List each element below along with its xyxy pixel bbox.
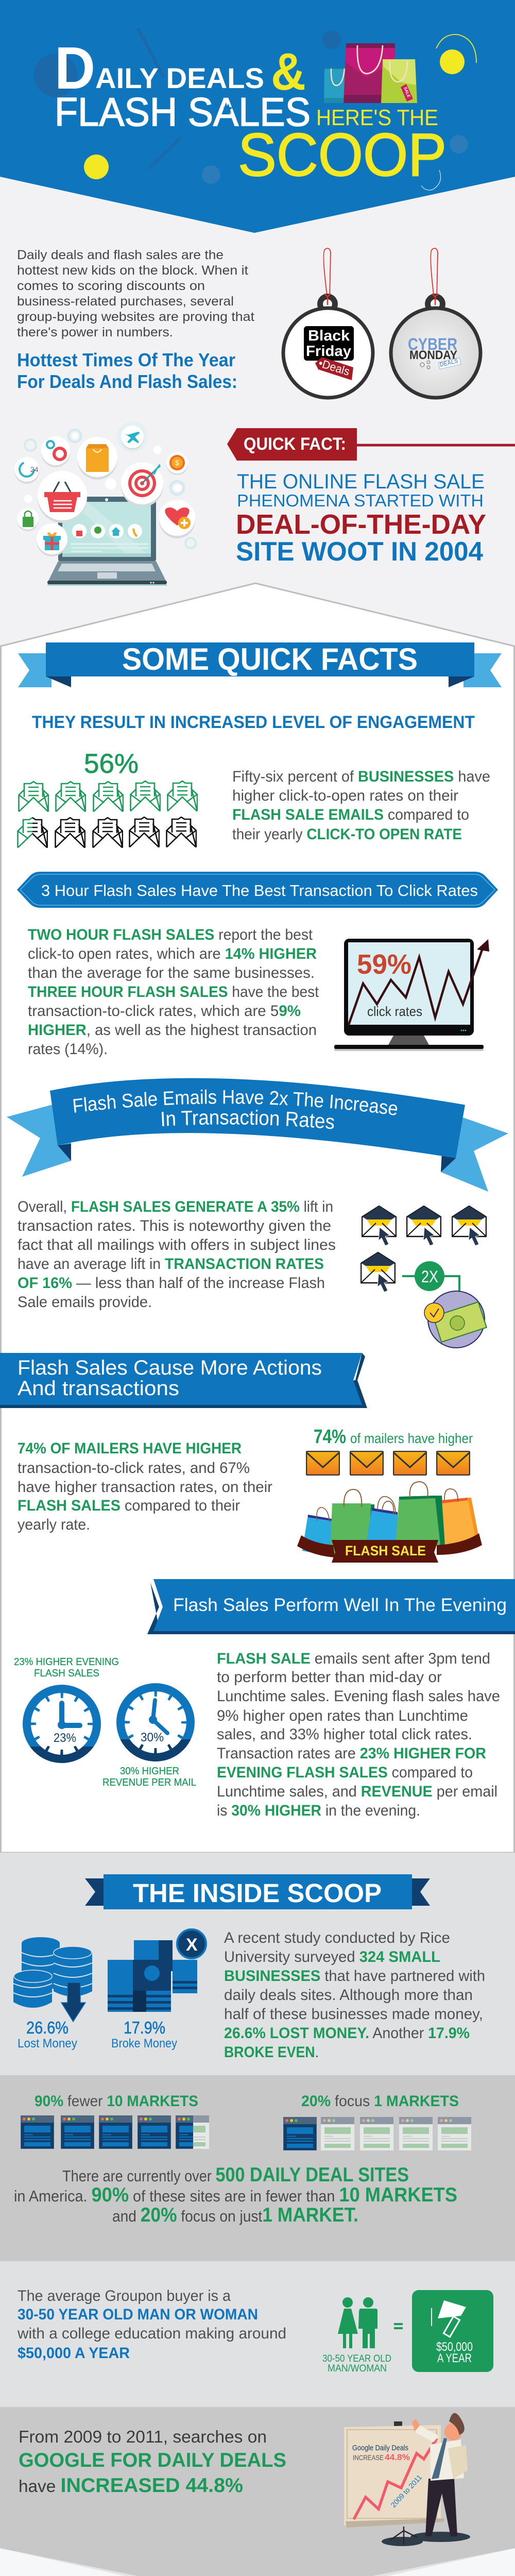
ribbon: flash sales perform well: Flash Sales Perform Well In The Evening [173,1595,507,1615]
text: overall flash sales: OF 16% — less than half of the increase Flash [18,1275,325,1292]
stat: lost money and broke money: 26.6% [26,2018,68,2037]
title: HERE'S THE [316,105,438,130]
icon: evening clocks: 30% HIGHER [120,1766,179,1777]
icon: shopping bags: SALE [403,86,411,98]
icon: cyber monday tag [391,248,480,398]
icon: man and woman: 30-50 YEAR OLD [322,2353,391,2364]
ribbon: the inside scoop [85,1874,430,1909]
intro text: hottest new kids on the block. When it [17,263,248,278]
text: overall flash sales: fact that all mailings with offers in subject lines [18,1236,336,1253]
text: 74 percent of mailers: 74% OF MAILERS HAVE HIGHER [18,1440,242,1457]
icon: presenter with chart [344,2413,470,2546]
bubbles: $ [175,459,179,467]
text: overall flash sales: have an average lift in TRANSACTION RATES [18,1256,324,1273]
text: rice university study: University surveyed 324 SMALL [224,1948,440,1965]
intro text [17,248,254,340]
text: average groupon buyer: $50,000 A YEAR [18,2345,130,2362]
icon: laptop with shopping bubbles [14,421,196,586]
title: & [271,42,306,101]
text: 500 daily deal sites: in America. 90% of these sites are in fewer than 10 MARKETS [14,2184,457,2206]
icon: man and woman: MAN/WOMAN [328,2363,387,2374]
text: overall flash sales: Overall, FLASH SALES GENERATE A 35% lift in [18,1198,333,1215]
title: AILY DEALS [95,62,264,94]
text: 74 percent of mailers: have higher transaction rates, on their [18,1479,272,1496]
bubbles: 24 [30,465,39,473]
text: 74 percent of mailers: transaction-to-click rates, and 67% [18,1460,250,1477]
intro text: Daily deals and flash sales are the [17,248,224,262]
pill heading: 3 hour flash sales [17,872,498,908]
curved ribbon: flash sale emails [7,1078,508,1192]
heading: hottest times: Hottest Times Of The Year [17,349,235,370]
icon: cyber monday tag: CYBER [408,335,457,353]
text: two hour flash sales [28,926,319,1058]
text: two hour flash sales: THREE HOUR FLASH SALES have the best [28,984,319,1001]
text: 500 daily deal sites: and 20% focus on just1 MARKET. [112,2204,358,2226]
panel: header [0,0,515,233]
subheading: engagement: THEY RESULT IN INCREASED LEVEL OF ENGAGEMENT [32,713,475,732]
text: rice university study [224,1929,485,2061]
ribbon: flash sales perform well [147,1579,515,1634]
decorative shapes in header [34,29,476,190]
text: evening performance: Lunchtime sales. Evening flash sales have [217,1688,500,1705]
icon: evening clocks: 23% [54,1731,76,1745]
text: evening performance: 9% higher open rates than Lunchtime [217,1707,468,1724]
panel: markets [0,2075,515,2261]
icon: presenter with chart: 44.8% [385,2452,410,2462]
icon: evening clocks [14,1656,196,1788]
text: two hour flash sales: HIGHER, as well as the highest transaction [28,1022,317,1039]
stat: lost money and broke money: 17.9% [124,2018,165,2037]
text: rice university study: A recent study conducted by Rice [224,1929,450,1946]
icon: shopping bags [324,43,417,103]
text: overall flash sales [18,1198,336,1311]
text: two hour flash sales: rates (14%). [28,1041,108,1058]
pictogram: 56 percent envelopes: 56% [84,749,139,779]
icon: monitor with 59 percent chart: 59% [357,949,411,980]
text: evening performance: sales, and 33% higher total click rates. [217,1726,472,1743]
icon: graduation salary card: A YEAR [437,2351,472,2365]
text: fifty-six percent: FLASH SALE EMAILS compared to [232,806,469,823]
icon: black friday tag: Friday [306,343,351,360]
intro text: group-buying websites are proving that [17,310,254,324]
icon: evening clocks: REVENUE PER MAIL [102,1777,196,1788]
pictogram: 90 percent fewer 10 markets: 90% fewer 10 MARKETS [35,2093,198,2110]
text: evening performance [217,1650,500,1819]
curved ribbon: flash sale emails: In Transaction Rates [162,1110,334,1129]
text: evening performance: Transaction rates are 23% HIGHER FOR [217,1745,486,1762]
title: FLASH SALES [55,89,311,134]
callout: quick fact: THE ONLINE FLASH SALE [237,470,485,493]
icon: presenter with chart: Google Daily Deals [352,2444,408,2452]
icon: monitor with 59 percent chart: click rates [367,1004,422,1019]
icon: money stacks: X [186,1935,198,1955]
heading ribbon: some quick facts [18,642,502,687]
icon: mailers and flash sale bags [297,1426,482,1563]
text: fifty-six percent [232,768,490,843]
icon: clicking envelopes to money: 2X [421,1267,438,1286]
text: overall flash sales: Sale emails provide. [18,1294,152,1311]
stat: lost money and broke money: Broke Money [111,2037,177,2050]
intro text: there's power in numbers. [17,325,173,340]
stat: lost money and broke money [18,2018,177,2050]
icon: evening clocks: 30% [141,1731,164,1744]
text: rice university study: daily deals sites. Although more than [224,1987,473,2004]
text: evening performance: EVENING FLASH SALES compared to [217,1764,473,1781]
callout: quick fact: SITE WOOT IN 2004 [236,537,483,567]
heading ribbon: some quick facts: SOME QUICK FACTS [122,642,418,676]
curved ribbon: flash sale emails: Flash Sale Emails Have 2x The Increase [73,1089,398,1115]
icon: cyber monday tag: DEALS [439,357,459,368]
icon: monitor with 59 percent chart [334,939,489,1051]
text: rice university study: BUSINESSES that have partnered with [224,1968,485,1985]
text: 500 daily deal sites: There are currently over 500 DAILY DEAL SITES [62,2164,409,2186]
text: evening performance: FLASH SALE emails sent after 3pm tend [217,1650,490,1667]
icon: mailers and flash sale bags: 74% [314,1426,346,1448]
icon: evening clocks: 23% HIGHER EVENING [14,1656,119,1668]
icon: black friday tag: Black [308,328,350,344]
text: evening performance: is 30% HIGHER in the evening. [217,1802,420,1819]
icon: money stacks [108,1929,206,2012]
callout: quick fact: DEAL-OF-THE-DAY [236,509,486,540]
text: fifty-six percent: higher click-to-open rates on their [232,787,458,804]
text: fifty-six percent: their yearly CLICK-TO OPEN RATE [232,826,462,843]
callout: quick fact: PHENOMENA STARTED WITH [237,491,484,510]
text: google searches [19,2427,286,2497]
ribbon: the inside scoop: THE INSIDE SCOOP [133,1878,382,1908]
icon: mailers and flash sale bags: FLASH SALE [345,1543,426,1558]
title: SCOOP [238,121,447,189]
icon: black friday tag: •Deals [317,357,351,378]
text: average groupon buyer: with a college education making around [17,2325,286,2342]
panel: quick facts background [1,583,514,1853]
icon: coin stacks [13,1937,92,2022]
text: evening performance: to perform better than mid-day or [217,1669,442,1686]
icon: graduation salary card [412,2290,493,2372]
text: average groupon buyer: 30-50 YEAR OLD MAN OR WOMAN [18,2306,258,2323]
icon: mailers and flash sale bags: of mailers have higher [350,1431,473,1446]
pictogram: 90 percent fewer 10 markets [21,2093,209,2149]
text: fifty-six percent: Fifty-six percent of BUSINESSES have [232,768,490,785]
heading: hottest times [17,349,237,392]
text: two hour flash sales: TWO HOUR FLASH SALES report the best [28,926,313,943]
text: google searches: From 2009 to 2011, searches on [19,2427,267,2446]
panel: groupon buyer [0,2261,515,2407]
icon: presenter with chart: INCREASE [353,2453,384,2462]
icon: clicking envelopes to money [361,1206,487,1348]
icon: cyber monday tag: MONDAY [409,348,457,362]
panel: inside scoop [0,1853,515,2075]
text: two hour flash sales: click-to open rates, which are 14% HIGHER [28,945,317,962]
text: google searches: GOOGLE FOR DAILY DEALS [19,2449,286,2471]
text: rice university study: half of these businesses made money, [224,2006,483,2023]
ribbon: flash sales cause more actions: And transactions [18,1377,179,1400]
intro text: comes to scoring discounts on [17,279,205,293]
ribbon: flash sales cause more actions: Flash Sales Cause More Actions [18,1357,322,1379]
text: 74 percent of mailers: yearly rate. [18,1516,90,1533]
title [55,35,447,189]
text: evening performance: Lunchtime sales, and REVENUE per email [217,1783,497,1800]
callout: quick fact [227,428,515,567]
text: overall flash sales: transaction rates. This is noteworthy given the [18,1217,331,1234]
ribbon: flash sales cause more actions [0,1353,367,1408]
icon: graduation salary card: $50,000 [436,2340,473,2354]
text: two hour flash sales: transaction-to-click rates, which are 59% [28,1003,301,1020]
bubbles [14,421,196,556]
callout: quick fact: QUICK FACT: [244,434,346,454]
heading: hottest times: For Deals And Flash Sales: [17,371,237,392]
intro text: business-related purchases, several [17,294,234,309]
text: rice university study: BROKE EVEN. [224,2044,319,2061]
text: google searches: have INCREASED 44.8% [19,2475,243,2497]
text: average groupon buyer [17,2287,286,2362]
pictogram: 20 percent focus 1 market: 20% focus 1 MARKETS [301,2093,459,2110]
icon: black friday tag [283,248,373,398]
pictogram: 20 percent focus 1 market [283,2093,471,2150]
pill heading: 3 hour flash sales: 3 Hour Flash Sales Have The Best Transaction To Click Rates [41,882,478,900]
pictogram: 56 percent envelopes [18,749,197,848]
icon: man and woman [322,2297,403,2374]
text: 74 percent of mailers: FLASH SALES compared to their [18,1497,240,1514]
icon: evening clocks: FLASH SALES [34,1668,99,1679]
icon: presenter with chart: 2009 to 2011 [389,2473,423,2509]
text: rice university study: 26.6% LOST MONEY. Another 17.9% [224,2025,470,2042]
title: D [55,35,95,101]
text: average groupon buyer: The average Groupon buyer is a [18,2287,231,2304]
text: 500 daily deal sites [14,2164,457,2226]
text: two hour flash sales: than the average for the same businesses. [28,964,315,981]
panel: google searches [0,2407,515,2576]
panel: spending section background [0,2524,515,2576]
text: 74 percent of mailers [18,1440,272,1533]
stat: lost money and broke money: Lost Money [18,2037,77,2050]
